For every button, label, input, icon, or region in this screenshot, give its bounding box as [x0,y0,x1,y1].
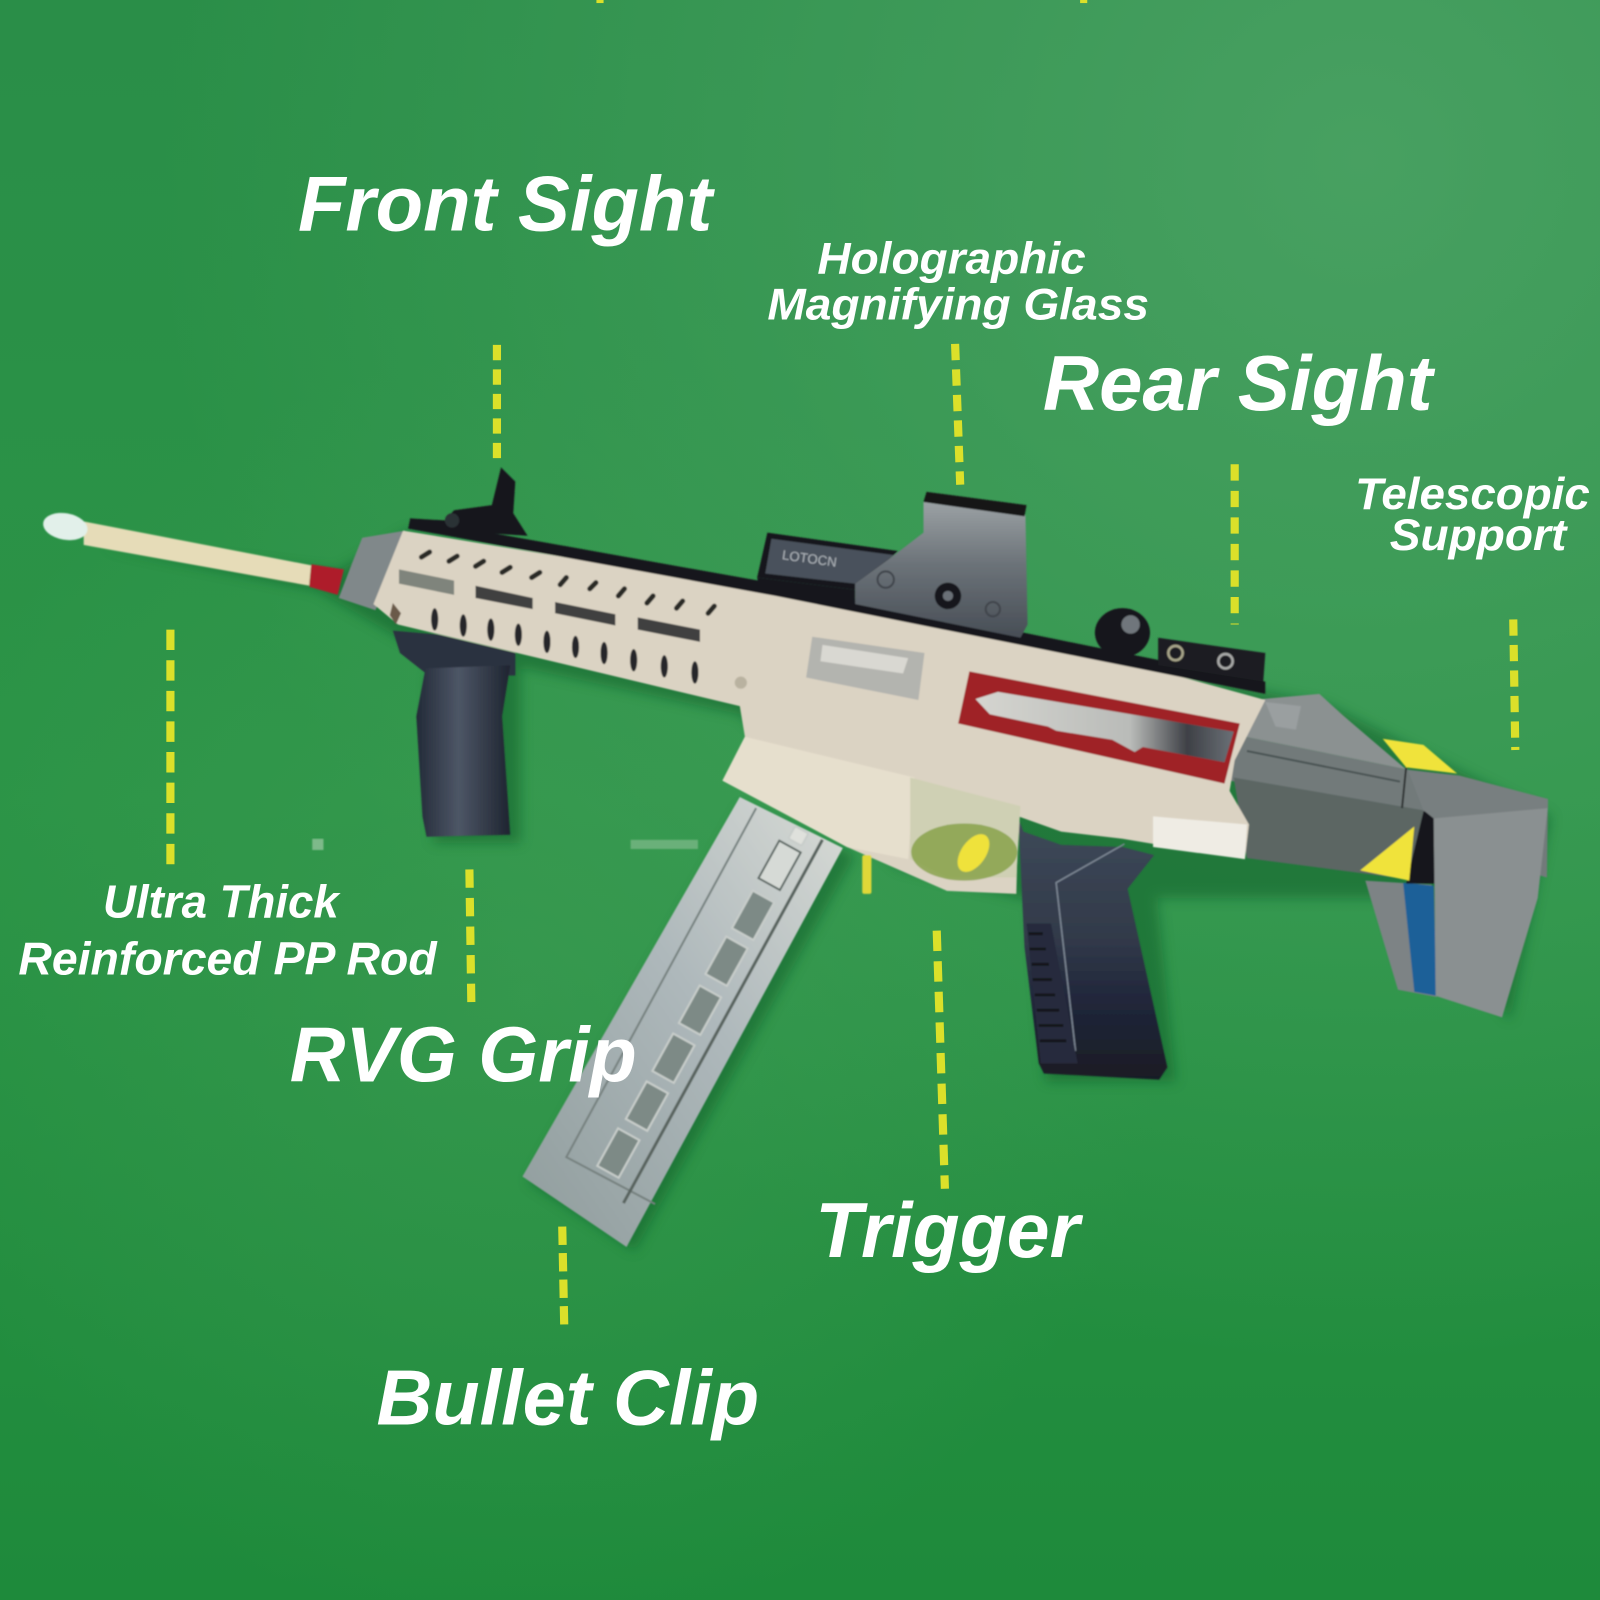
front grey cap [339,531,405,610]
dashed line: ultra thick rod [166,630,174,867]
rear sight [1095,608,1265,682]
dashed line: trigger [937,931,945,1189]
dashed line: RVG grip [469,869,471,1010]
dashed line: telescopic support [1513,619,1515,750]
holographic sight [757,492,1028,645]
red slide slot [958,671,1240,784]
label: Holographic Magnifying Glass: Magnifying Glass [767,278,1149,329]
foregrip [393,631,515,837]
blaster illustration [41,467,1548,1247]
dashed line: holographic magnifying glass [955,344,960,485]
label: Telescopic Support: Support [1390,509,1568,560]
label: Ultra Thick Reinforced PP Rod: Reinforced PP Rod [18,932,438,984]
label: Holographic Magnifying Glass [767,232,1149,329]
label: Telescopic Support [1355,468,1590,560]
label: Telescopic Support: Telescopic [1355,468,1590,519]
label: Trigger: Trigger [815,1188,1083,1274]
barrel: PP rod with tip [41,510,344,595]
label: Rear Sight: Rear Sight [1043,341,1436,427]
handguard lower slots [390,603,698,684]
stock upper section [1230,694,1548,880]
telescopic support butt and pad [1365,770,1548,1017]
top rail [408,518,1265,694]
front sight [410,467,528,536]
optic brand mark: LOTOCN [781,547,838,570]
handguard rail windows [399,569,700,642]
rear notch on stock join [1265,702,1301,730]
label: Holographic Magnifying Glass: Holographic [817,232,1086,283]
dashed line: rear sight [1231,464,1239,624]
pistol grip [1018,818,1167,1080]
label: Bullet Clip: Bullet Clip [377,1355,759,1441]
label: RVG Grip: RVG Grip [290,1013,637,1099]
label: Ultra Thick Reinforced PP Rod [18,875,438,984]
handguard top slots [421,552,714,613]
receiver and handguard body [373,531,1265,894]
magazine windows [597,826,809,1178]
dashed line: front sight [493,345,501,459]
dashed line: bullet clip [562,1227,564,1329]
yellow markers on stock [1360,739,1457,881]
mat print marks [312,839,698,850]
gun shadow [102,531,1551,1251]
callout dashes: tips at top edge [600,0,1084,3]
magazine: bullet clip [522,797,843,1247]
trigger [862,823,1017,894]
ejection port [806,637,924,700]
label: Ultra Thick Reinforced PP Rod: Ultra Thick [103,875,341,927]
label: Front Sight: Front Sight [298,162,715,248]
